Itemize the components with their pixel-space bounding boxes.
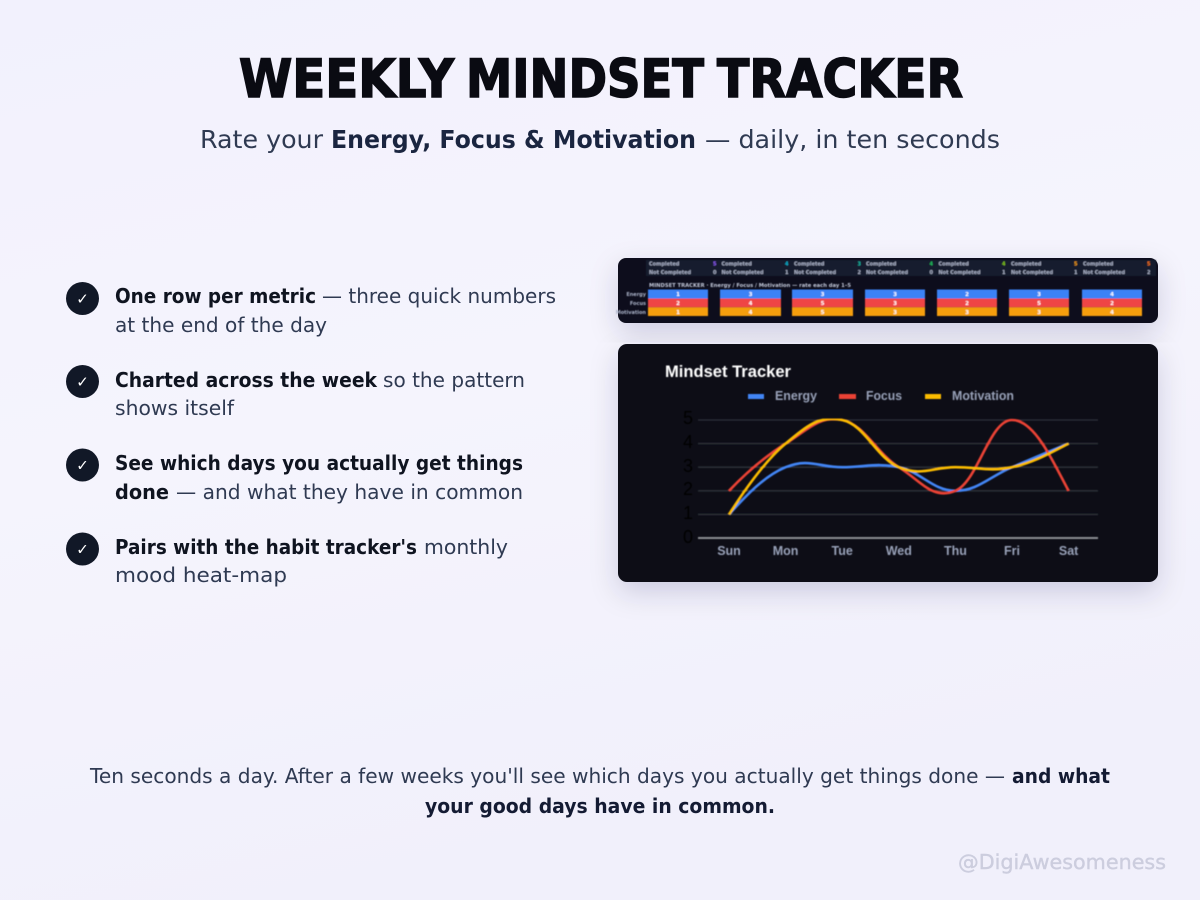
closing statement — [89, 764, 1110, 818]
completed summary band: 5 — [1147, 262, 1151, 268]
bullet 4 — [66, 532, 508, 587]
legend — [748, 389, 1014, 403]
y axis labels: 4 — [683, 432, 693, 452]
cell values: 3 — [1037, 292, 1041, 298]
row labels: Energy — [626, 292, 647, 298]
bullet 4: monthly — [424, 535, 508, 559]
bullet 4: mood heat-map — [115, 563, 287, 587]
x axis labels: Mon — [773, 544, 798, 558]
y axis labels: 0 — [683, 527, 693, 547]
motivation line — [729, 419, 1069, 514]
cell values: 2 — [676, 301, 680, 307]
cell values: 2 — [965, 292, 969, 298]
x axis labels — [717, 544, 1079, 558]
title — [239, 49, 963, 110]
cell values: 4 — [749, 301, 753, 307]
completed summary band: 4 — [930, 262, 934, 268]
bullet 3 — [66, 448, 523, 504]
y axis labels: 3 — [683, 456, 693, 476]
focus row — [648, 298, 1142, 307]
bullet 3: done — [115, 480, 169, 504]
completed summary band: 4 — [1002, 262, 1006, 268]
y axis labels: 2 — [683, 479, 693, 499]
subtitle: — daily, in ten seconds — [705, 125, 1000, 154]
cell values: 2 — [1110, 301, 1114, 307]
cell values: 5 — [821, 310, 825, 316]
subtitle: Energy, Focus & Motivation — [331, 125, 696, 154]
completed summary band: Completed — [1083, 262, 1114, 268]
bullet 1: — three quick numbers — [322, 284, 556, 308]
completed summary band — [646, 260, 1156, 276]
completed summary band: Completed — [722, 262, 752, 268]
focus line — [729, 419, 1069, 493]
completed summary band: Not Completed — [938, 270, 981, 276]
bullet 1 — [66, 282, 556, 337]
completed summary band: 3 — [858, 262, 862, 268]
cell values: 4 — [1110, 292, 1114, 298]
completed summary band: 5 — [1074, 262, 1078, 268]
bullet 2: so the pattern — [383, 368, 525, 392]
bullet 1: at the end of the day — [115, 313, 327, 337]
cell values: 4 — [749, 310, 753, 316]
series lines — [729, 419, 1069, 514]
closing statement: and what — [1012, 764, 1110, 788]
completed summary band: Not Completed — [866, 270, 909, 276]
y axis labels: 5 — [683, 408, 693, 428]
bullet 2: ✓ — [76, 373, 89, 391]
cell values: 3 — [893, 292, 897, 298]
cell values: 5 — [1037, 301, 1041, 307]
cell values: 3 — [1037, 310, 1041, 316]
x axis labels: Sat — [1059, 544, 1079, 558]
legend: Focus — [866, 389, 902, 403]
completed summary band: Completed — [866, 262, 897, 268]
completed summary band: 0 — [713, 270, 717, 276]
panel: spreadsheet screenshot — [616, 258, 1158, 323]
y axis labels: 1 — [683, 503, 693, 523]
closing statement: Ten seconds a day. After a few weeks you'll see which days you actually get things done — — [89, 764, 1005, 788]
motivation row — [648, 307, 1142, 316]
completed summary band: Not Completed — [794, 270, 837, 276]
x axis labels: Tue — [832, 544, 853, 558]
title: TRACKER — [717, 49, 963, 110]
x axis labels: Wed — [886, 544, 912, 558]
sheet heading: MINDSET TRACKER · Energy / Focus / Motivation — rate each day 1–5 — [649, 283, 851, 289]
completed summary band: Completed — [1011, 262, 1042, 268]
closing statement: your good days have in common. — [425, 794, 775, 818]
completed summary band: Not Completed — [1083, 270, 1126, 276]
completed summary band: Completed — [649, 262, 680, 268]
energy row — [648, 290, 1142, 298]
energy line — [729, 444, 1069, 514]
legend: Motivation — [952, 389, 1014, 403]
x axis labels: Fri — [1004, 544, 1020, 558]
cell values: 3 — [749, 292, 753, 298]
cell values: 2 — [965, 301, 969, 307]
title: MINDSET — [466, 49, 704, 110]
x axis labels: Thu — [944, 544, 967, 558]
panel: line chart — [618, 344, 1158, 582]
completed summary band: 5 — [713, 262, 717, 268]
watermark: @DigiAwesomeness — [958, 850, 1166, 874]
subtitle — [200, 125, 1000, 154]
completed summary band: Completed — [794, 262, 825, 268]
completed summary band: 1 — [1002, 270, 1006, 276]
chart title: Mindset Tracker — [665, 363, 792, 381]
completed summary band: 0 — [930, 270, 934, 276]
completed summary band: Not Completed — [1011, 270, 1054, 276]
completed summary band: 1 — [1074, 270, 1078, 276]
bullet 4: Pairs with the habit tracker's — [115, 535, 417, 559]
bullet 4: ✓ — [76, 540, 89, 558]
bullet 3: ✓ — [76, 456, 89, 474]
cell values: 3 — [893, 310, 897, 316]
completed summary band: 2 — [1147, 270, 1151, 276]
bullet 2 — [66, 365, 525, 420]
bullet list — [66, 282, 556, 587]
bullet 3: — and what they have in common — [176, 480, 523, 504]
cell values: 4 — [1110, 310, 1114, 316]
completed summary band: Completed — [938, 262, 969, 268]
x axis labels: Sun — [717, 544, 741, 558]
bullet 2: Charted across the week — [115, 368, 378, 392]
cell values: 3 — [965, 310, 969, 316]
bullet 1: One row per metric — [115, 284, 316, 308]
completed summary band: Not Completed — [649, 270, 692, 276]
y axis labels — [683, 408, 693, 547]
cell values: 3 — [893, 301, 897, 307]
completed summary band: 1 — [785, 270, 789, 276]
bullet 1: ✓ — [76, 290, 89, 308]
row labels: Motivation — [616, 310, 646, 316]
cell values: 5 — [821, 301, 825, 307]
completed summary band: 4 — [785, 262, 789, 268]
subtitle: Rate your — [200, 125, 324, 154]
bullet 3: See which days you actually get things — [115, 451, 523, 475]
cell values: 1 — [676, 310, 680, 316]
completed summary band: Not Completed — [722, 270, 764, 276]
cell values — [676, 292, 1114, 316]
cell values: 1 — [676, 292, 680, 298]
title: WEEKLY — [239, 49, 455, 110]
row labels — [616, 292, 647, 316]
bullet 2: shows itself — [115, 396, 235, 420]
cell values: 3 — [821, 292, 825, 298]
row labels: Focus — [630, 301, 646, 307]
completed summary band: 2 — [858, 270, 862, 276]
legend: Energy — [775, 389, 817, 403]
